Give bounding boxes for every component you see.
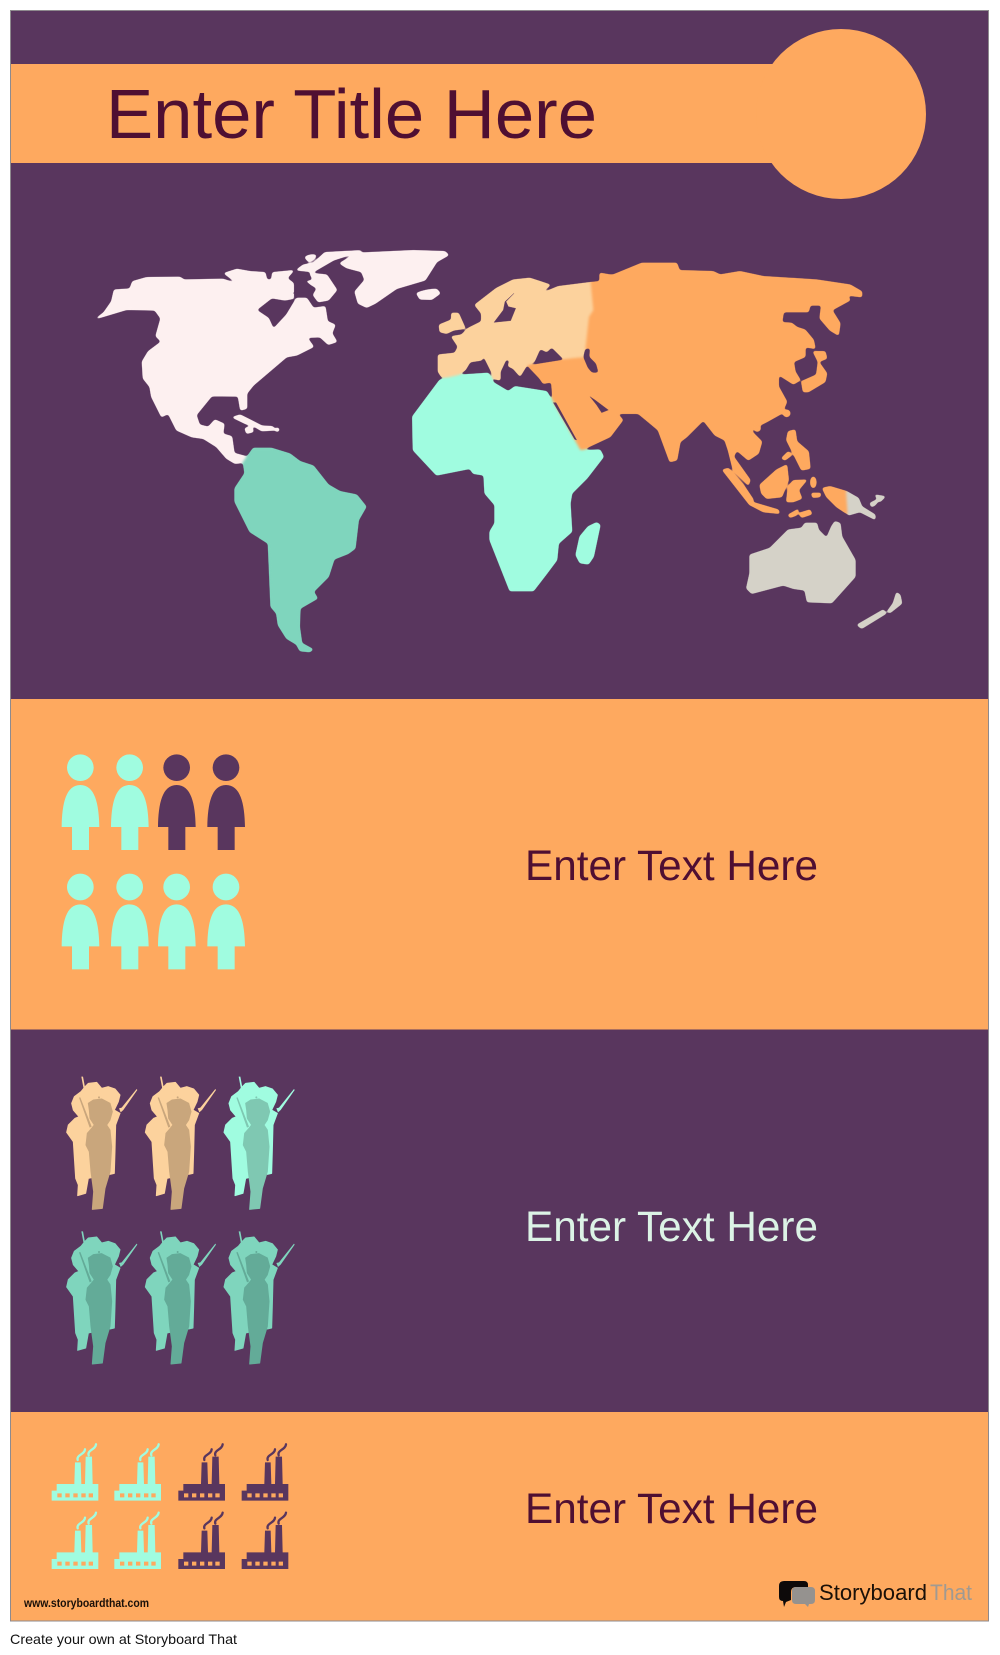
storyboard that logo: That [930,1580,972,1605]
soldiers pictogram [67,1077,295,1364]
panel: top map section [10,10,988,699]
website url: www.storyboardthat.com [23,1598,149,1610]
text block: Enter Text Here [525,1485,818,1533]
map: asia [528,263,862,517]
map: europe [438,278,593,380]
map: inland seas [293,282,608,440]
storyboard that logo: Storyboard [819,1580,927,1605]
map: south america [235,448,366,652]
panel: factories section [10,1412,988,1621]
title banner [11,29,926,199]
storyboard that logo [779,1580,972,1607]
map: africa [413,373,603,591]
map: north america [97,251,448,463]
people pictogram [62,754,245,969]
footer caption: Create your own at Storyboard That [10,1631,237,1647]
title: Enter Title Here [106,75,597,153]
factories pictogram [52,1444,288,1569]
world map [97,251,902,652]
panel: soldiers section [10,1030,988,1412]
map: australia and oceania [747,492,902,628]
text block: Enter Text Here [525,1203,818,1251]
panel: people section [10,699,988,1030]
text block: Enter Text Here [525,842,818,890]
